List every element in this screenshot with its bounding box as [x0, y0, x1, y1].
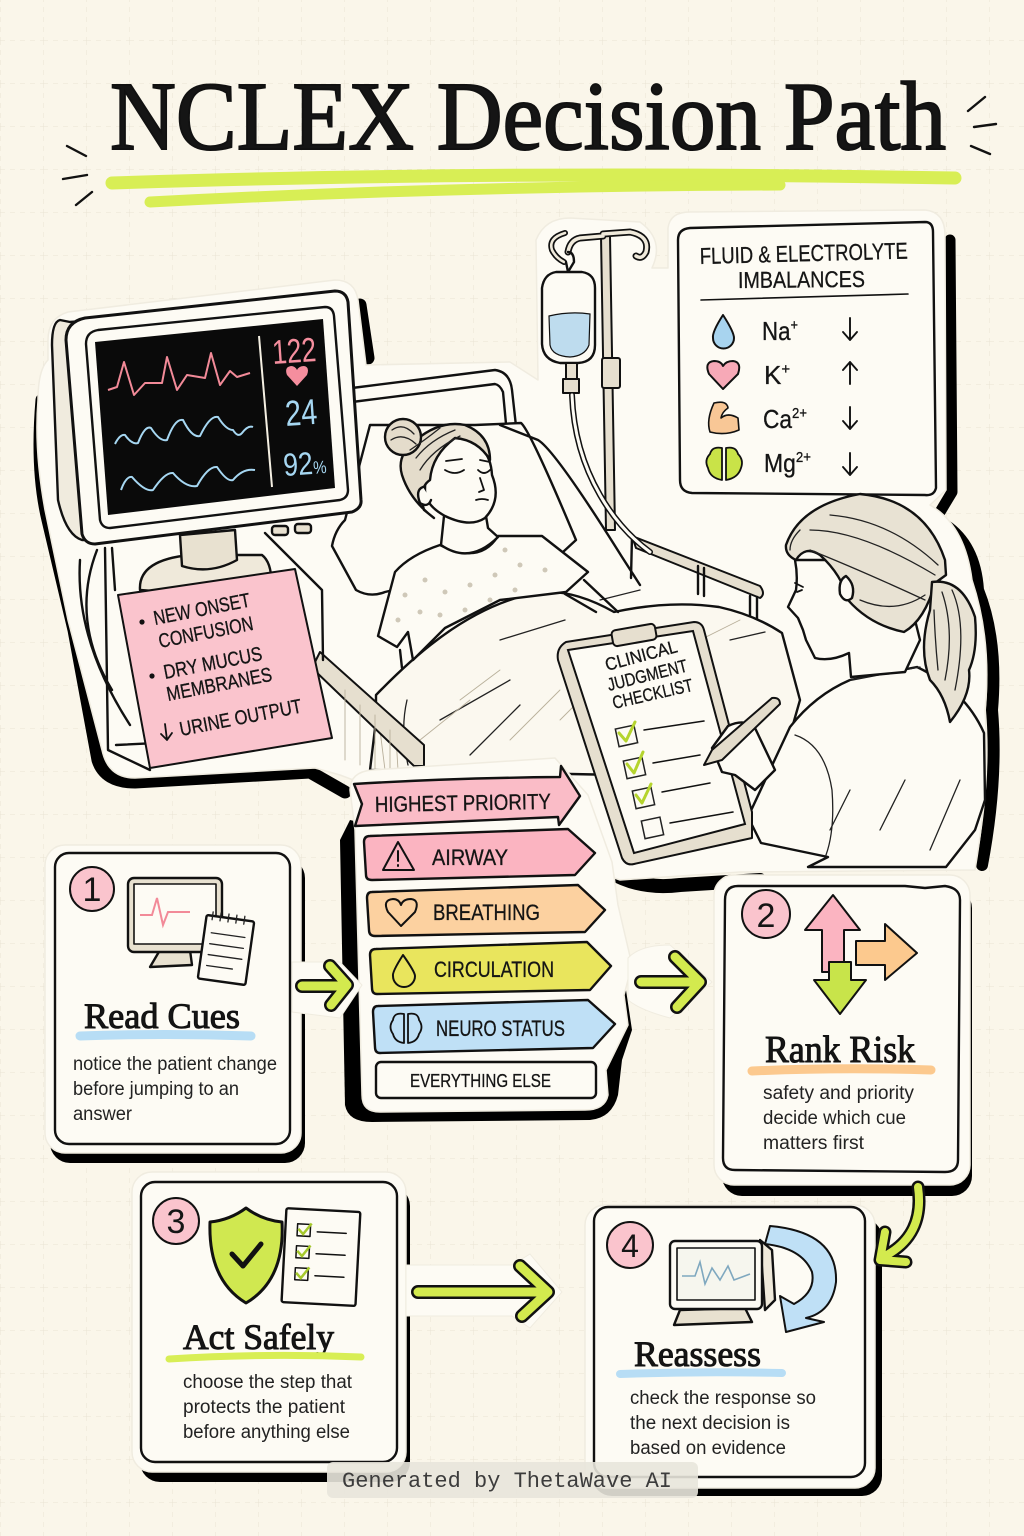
step description: [183, 1372, 353, 1443]
ear: [840, 576, 853, 600]
priority: everything else: EVERYTHING ELSE: [410, 1070, 551, 1091]
panel heading: FLUID & ELECTROLYTE: [699, 238, 908, 269]
step description: [763, 1083, 914, 1154]
hand: [712, 722, 775, 790]
checklist heading: CLINICAL: [603, 636, 680, 675]
note: assessment findings: [118, 569, 332, 768]
row: sodium: +: [790, 317, 798, 334]
stand and cart: [80, 524, 325, 770]
hair bun: [385, 419, 421, 455]
title underline: [112, 175, 955, 202]
card: step 1 read cues: [45, 845, 305, 1163]
eyes, nose, mouth: [445, 459, 490, 500]
pen: [704, 698, 780, 765]
card: step 2 rank risk: [714, 875, 972, 1196]
head and neck: [788, 560, 920, 677]
step number: [742, 890, 790, 938]
checklist heading: [603, 636, 695, 713]
step description: notice the patient change: [73, 1054, 277, 1075]
card: step 3 act safely: [132, 1172, 410, 1482]
oxygen waveform: [121, 467, 255, 490]
step title: Reassess: [634, 1334, 761, 1374]
priority: breathing: BREATHING: [433, 900, 540, 925]
step description: choose the step that: [183, 1372, 353, 1393]
panel: fluid and electrolyte imbalances: [678, 222, 936, 495]
priority: highest priority: HIGHEST PRIORITY: [375, 789, 551, 817]
ladder shadow: [340, 820, 632, 1122]
connector and tube: [566, 363, 577, 379]
row: potassium: +: [781, 361, 790, 378]
priority: circulation: [370, 942, 611, 994]
mattress back: [500, 425, 640, 585]
illustration: patient: [378, 419, 618, 668]
note: assessment findings: DRY MUCUS: [162, 643, 264, 684]
vitals: respiratory rate: 24: [284, 391, 318, 434]
clip: [611, 623, 657, 647]
icon: heart: [286, 366, 308, 386]
note: assessment findings: MEMBRANES: [165, 664, 274, 706]
arrow: step 1 to priority ladder: [292, 962, 362, 1018]
clamp: [602, 358, 620, 388]
torso: [748, 667, 985, 867]
step description: [630, 1388, 816, 1459]
pole: [601, 236, 615, 530]
step number: [607, 1222, 653, 1268]
step number: 1: [83, 871, 101, 909]
priority: neuro status: [373, 1000, 615, 1053]
step description: the next decision is: [630, 1413, 790, 1434]
icon: monitor and notepad: [128, 878, 255, 985]
hook arms: [568, 232, 647, 257]
vitals: heart rate: 122: [271, 331, 317, 372]
ECG waveform: [108, 353, 250, 395]
row: calcium: Ca: [763, 404, 796, 434]
panel: clinical scene background: [37, 210, 987, 880]
clipboard back: [558, 622, 752, 864]
priority: everything else: [376, 1062, 596, 1098]
arms: [400, 580, 618, 668]
left bed rail: [312, 652, 424, 770]
gown: [378, 536, 588, 660]
arrow: step 3 to step 4: [406, 1254, 562, 1328]
title spark marks: [63, 97, 996, 205]
panel: fluid and electrolyte imbalances: IMBALANCES: [738, 266, 865, 293]
checklist heading: JUDGMENT: [605, 656, 690, 695]
respiration waveform: [115, 417, 253, 444]
icon: priority arrows: [805, 895, 917, 1014]
arrow: priority ladder to step 2: [628, 945, 712, 1018]
note: assessment findings: NEW ONSET: [152, 590, 252, 630]
priority: circulation: CIRCULATION: [434, 957, 554, 982]
vitals: oxygen saturation: 92%: [282, 444, 327, 483]
step description: [73, 1054, 277, 1125]
footer: generated by label: Generated by ThetaWave AI: [342, 1469, 672, 1494]
blanket: [370, 592, 800, 775]
illustration: nurse: [748, 494, 985, 867]
icon: shield and checklist: [210, 1208, 360, 1306]
arrow: step 2 to step 4: [880, 1187, 919, 1262]
step number: 4: [621, 1228, 639, 1264]
right rail: [631, 536, 763, 625]
row: sodium: Na: [762, 316, 795, 346]
bag: [542, 272, 595, 363]
icon: warning: [383, 842, 414, 870]
step description: before jumping to an: [73, 1079, 239, 1100]
checkboxes: [615, 725, 664, 839]
icon: drop: [393, 955, 415, 987]
fluid: [549, 313, 590, 357]
row: magnesium: 2+: [796, 449, 811, 466]
panel frame: [678, 222, 936, 495]
screen: [95, 319, 335, 515]
checklist heading: CHECKLIST: [610, 675, 695, 713]
ladder backing: [350, 758, 632, 1112]
face: [425, 438, 496, 523]
row: magnesium: [706, 448, 857, 480]
checklist lines: [644, 721, 733, 823]
step description: decide which cue: [763, 1108, 906, 1129]
screen divider: [259, 336, 272, 487]
row: sodium: [713, 315, 857, 348]
illustration: clinical judgment checklist clipboard: [558, 622, 780, 864]
icon: heart: [386, 899, 417, 926]
step title: Read Cues: [84, 996, 240, 1036]
step description: matters first: [763, 1133, 865, 1154]
illustration: vital signs monitor with stand: [52, 291, 361, 770]
step description: based on evidence: [630, 1438, 786, 1459]
footer: generated by label: [327, 1462, 698, 1498]
priority: neuro status: NEURO STATUS: [436, 1016, 565, 1041]
neck: [441, 516, 498, 553]
panel: priority ladder: [340, 758, 632, 1122]
monitor casing: [52, 320, 100, 540]
priority: airway: [364, 829, 595, 880]
step description: check the response so: [630, 1388, 816, 1409]
bed head frame: [352, 370, 516, 426]
icon: down arrow: [161, 724, 172, 740]
hair: [786, 494, 946, 632]
row: calcium: 2+: [792, 405, 807, 422]
row: magnesium: Mg: [764, 448, 800, 478]
panel: clinical scene shadows: [40, 240, 994, 886]
priority: airway: AIRWAY: [432, 845, 508, 870]
illustration: hospital bed: [312, 370, 800, 775]
note: assessment findings: URINE OUTPUT: [178, 696, 304, 741]
icon: IV pole and bag: [542, 232, 650, 552]
step title: Act Safely: [183, 1317, 334, 1357]
step number: [70, 867, 114, 911]
hair: [401, 424, 490, 518]
pillow: [332, 423, 576, 595]
step number: 2: [757, 897, 775, 935]
step description: before anything else: [183, 1422, 350, 1443]
ponytail: [924, 582, 976, 722]
row: potassium: K: [764, 360, 781, 390]
icon: monitor and loop arrow: [670, 1226, 836, 1332]
step description: safety and priority: [763, 1083, 914, 1104]
gown dots: [396, 548, 548, 622]
row: calcium: [709, 402, 857, 434]
step description: protects the patient: [183, 1397, 346, 1418]
eye: [795, 583, 803, 592]
priority: breathing: [367, 885, 605, 936]
step title: Rank Risk: [765, 1029, 915, 1071]
step number: 3: [167, 1203, 185, 1241]
step description: answer: [73, 1104, 133, 1125]
paper: [568, 631, 745, 853]
card: step 4 reassess: [585, 1205, 882, 1496]
row: potassium: [707, 360, 857, 390]
step number: [153, 1198, 199, 1244]
title: NCLEX Decision Path: [110, 63, 946, 171]
ear: [418, 487, 431, 505]
priority: highest priority: [354, 766, 580, 826]
icon: brain: [390, 1014, 422, 1043]
note: assessment findings: CONFUSION: [157, 613, 255, 653]
check marks: [619, 722, 651, 803]
